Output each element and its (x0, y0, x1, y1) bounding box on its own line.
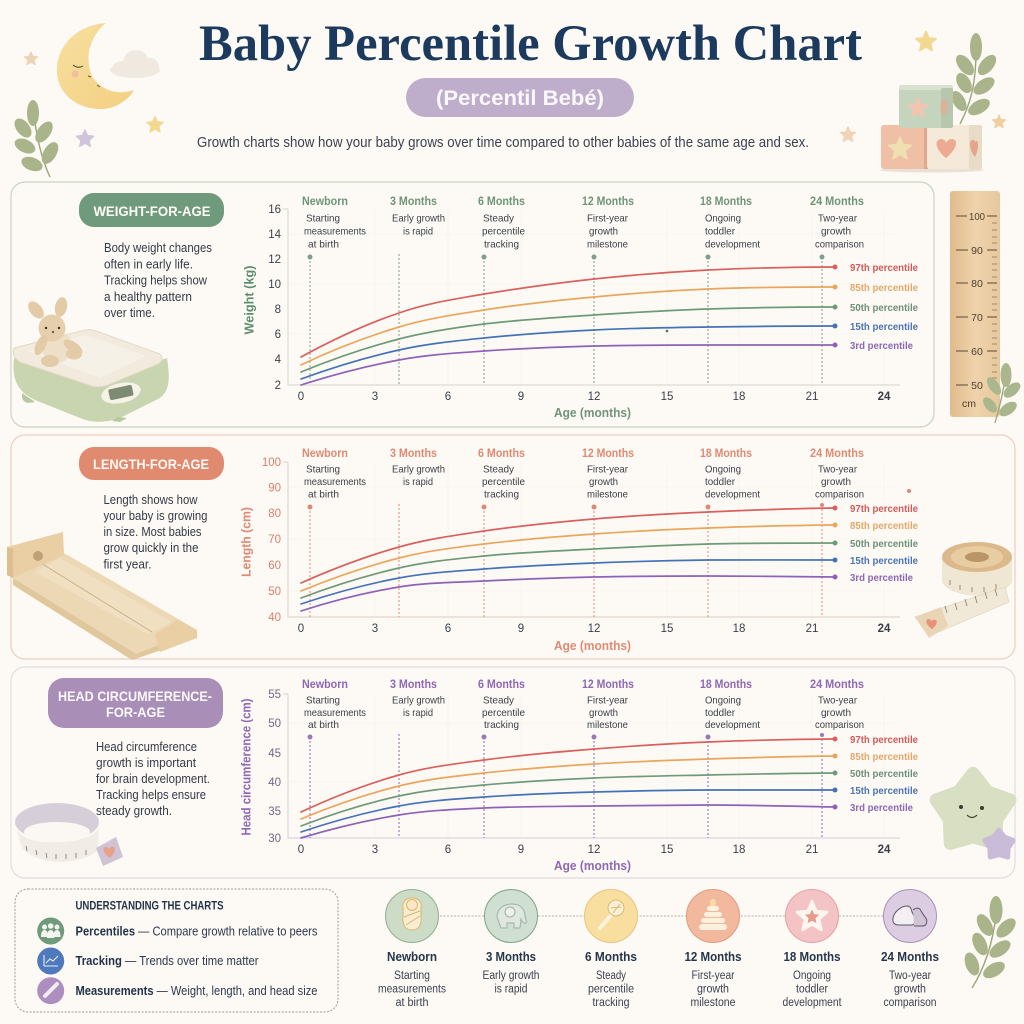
icon: peach star top-right (840, 127, 856, 141)
milestone labels: 12 Months (582, 677, 634, 691)
milestone labels: toddler (705, 476, 735, 488)
text block: length description: grow quickly in the (104, 541, 199, 555)
icon: wooden height ruler: 80 (971, 278, 983, 290)
milestone: 12 months (684, 890, 742, 1009)
percentile labels: 3rd percentile (850, 802, 913, 814)
x tick labels: 9 (518, 844, 524, 856)
y tick labels (262, 457, 281, 624)
milestone: 3 months (482, 890, 540, 996)
x tick labels: 15 (661, 391, 673, 403)
chart: length-for-age (262, 446, 918, 653)
x tick labels: 12 (588, 844, 600, 856)
milestone labels: 3 Months (390, 194, 437, 208)
milestone labels: at birth (308, 719, 339, 731)
percentile labels: 3rd percentile (850, 572, 913, 584)
intro text: Growth charts show how your baby grows over time compared to other babies of the same age and sex. (197, 135, 809, 151)
milestone labels: Early growth (392, 694, 445, 706)
milestone labels: 18 Months (700, 677, 752, 691)
milestone labels: 24 Months (810, 677, 864, 691)
milestone labels: tracking (484, 719, 519, 731)
x tick labels: 21 (806, 844, 818, 856)
icon: percentiles (37, 918, 64, 944)
milestone labels: percentile (482, 476, 525, 488)
icon: lavender star top-left (76, 130, 94, 146)
percentile labels: 97th percentile (850, 262, 918, 274)
x tick labels: 24 (878, 844, 891, 856)
y tick labels: 70 (268, 534, 281, 546)
x tick labels: 21 (806, 623, 818, 635)
y tick labels (268, 689, 281, 845)
text block: head description (96, 740, 210, 818)
icon: wooden height ruler: 100 (969, 211, 985, 223)
milestone: newborn: measurements (378, 984, 446, 996)
icon: wooden height ruler (950, 191, 1000, 417)
milestone labels: development (705, 719, 760, 731)
milestone labels: Steady (483, 212, 515, 224)
milestone: 6 months: 6 Months (585, 949, 637, 964)
x tick labels: 15 (661, 623, 673, 635)
milestone labels: tracking (484, 238, 519, 250)
x tick labels: 0 (298, 623, 304, 635)
y tick labels: 30 (268, 833, 281, 845)
milestone labels: measurements (304, 707, 366, 719)
milestone: 6 months: percentile (588, 984, 634, 996)
y tick labels: 80 (268, 508, 281, 520)
icon: plush star (936, 773, 1013, 857)
milestone dashed lines (308, 254, 824, 385)
milestone labels: Steady (483, 694, 515, 706)
heading pill: weight: WEIGHT-FOR-AGE (94, 203, 210, 219)
milestone labels: growth (821, 226, 851, 238)
milestone labels: 24 Months (810, 194, 864, 208)
percentile labels: 15th percentile (850, 555, 918, 567)
icon: leaf branch on ruler (980, 363, 1023, 423)
x tick labels: 18 (733, 844, 745, 856)
milestone: 18 months: Ongoing (793, 970, 831, 982)
milestone labels: Two-year (818, 212, 857, 224)
milestone labels: growth (589, 226, 618, 238)
x tick labels (298, 844, 891, 856)
panel: head-circumference-for-age (11, 667, 1019, 1012)
heading pill: weight (79, 193, 224, 227)
heading pill: head circumference: FOR-AGE (106, 704, 165, 720)
percentile labels (850, 734, 918, 814)
y tick labels: 50 (268, 586, 281, 598)
y tick labels: 14 (268, 229, 282, 241)
milestone labels: 6 Months (478, 446, 525, 460)
milestone labels: Early growth (392, 212, 445, 224)
percentile curves (301, 736, 838, 838)
percentile labels: 15th percentile (850, 321, 918, 333)
x tick labels: 6 (445, 623, 451, 635)
text block: head description: Tracking helps ensure (96, 788, 206, 802)
milestone dashed lines (308, 733, 824, 838)
milestone labels: 12 Months (582, 194, 634, 208)
milestone labels: 18 Months (700, 194, 752, 208)
percentile labels: 3rd percentile (850, 340, 913, 352)
milestone labels: Ongoing (705, 694, 741, 706)
text block: head description: steady growth. (96, 804, 172, 818)
milestone: 12 months: growth (697, 984, 729, 996)
text block: weight description (104, 241, 212, 320)
text block: weight description: often in early life. (104, 258, 193, 272)
milestone: 24 months: Two-year (889, 970, 931, 982)
text block: length description: first year. (104, 558, 152, 572)
milestone labels: tracking (484, 488, 519, 500)
milestone labels: is rapid (403, 226, 433, 238)
x tick labels: 3 (372, 844, 378, 856)
icon: small star top-right (992, 115, 1006, 128)
text block: head description: for brain development. (96, 772, 210, 786)
heading pill: length: LENGTH-FOR-AGE (93, 456, 209, 472)
y tick labels: 12 (268, 254, 281, 266)
y tick labels: 55 (268, 689, 281, 701)
milestone labels: Ongoing (705, 212, 741, 224)
milestone labels: 6 Months (478, 194, 525, 208)
milestone: 6 months (584, 890, 638, 1009)
x tick labels: 0 (298, 391, 304, 403)
y tick labels (268, 204, 282, 392)
icon: head measuring tape (15, 803, 123, 866)
milestone labels: 12 Months (582, 446, 634, 460)
x tick labels: 24 (878, 391, 891, 403)
milestone labels: Newborn (302, 194, 348, 208)
milestone labels: Starting (306, 464, 340, 476)
milestone: 18 months: 18 Months (784, 949, 840, 964)
y tick labels: 50 (268, 718, 281, 730)
milestone: newborn (378, 890, 446, 1009)
percentile curves (301, 264, 838, 385)
icon: cloud (110, 50, 160, 78)
milestone: 24 months: comparison (884, 997, 936, 1009)
icon: peach star top-left (24, 52, 38, 65)
x tick labels: 9 (518, 623, 524, 635)
milestone labels: milestone (587, 238, 628, 250)
milestone: newborn: at birth (396, 997, 428, 1009)
milestone labels (302, 446, 864, 500)
milestone labels: milestone (587, 488, 628, 500)
milestone labels: at birth (308, 488, 339, 500)
milestone: 24 months: growth (894, 984, 926, 996)
milestone labels: at birth (308, 238, 339, 250)
milestone labels: is rapid (403, 476, 433, 488)
legend item: tracking: Tracking — Trends over time matter (76, 954, 258, 968)
milestone labels: Two-year (818, 464, 857, 476)
milestone: 12 months: First-year (692, 970, 735, 982)
percentile labels: 50th percentile (850, 768, 918, 780)
milestone labels: toddler (705, 226, 735, 238)
milestone: 24 months (881, 890, 939, 1009)
y axis title: head circumference: Head circumference (cm) (238, 698, 254, 836)
icon: measurements (37, 977, 64, 1004)
y tick labels: 8 (275, 304, 281, 316)
y tick labels: 100 (262, 457, 281, 469)
text block: head description: Head circumference (96, 740, 197, 754)
milestone labels: 3 Months (390, 677, 437, 691)
milestone labels: growth (821, 707, 851, 719)
milestone: 12 months: 12 Months (684, 949, 742, 964)
icon: wooden height ruler: 50 (971, 380, 983, 392)
milestone labels: development (705, 238, 760, 250)
y axis title: length: Length (cm) (238, 507, 254, 577)
panel: length-for-age (7, 435, 1019, 1012)
chart: weight-for-age (268, 194, 918, 420)
percentile labels: 50th percentile (850, 302, 918, 314)
milestone labels: measurements (304, 226, 366, 238)
milestone: 12 months: milestone (690, 997, 736, 1009)
percentile labels: 50th percentile (850, 538, 918, 550)
milestone labels: toddler (705, 707, 735, 719)
percentile labels: 97th percentile (850, 734, 918, 746)
legend title: UNDERSTANDING THE CHARTS (76, 900, 224, 912)
x tick labels: 18 (733, 391, 745, 403)
x axis title: length: Age (months) (554, 638, 631, 653)
y tick labels: 40 (268, 777, 281, 789)
icon: yellow star top-left (147, 116, 163, 132)
x tick labels: 24 (878, 623, 891, 635)
percentile labels: 85th percentile (850, 282, 918, 294)
legend item: measurements: Measurements — Weight, length, and head size (76, 984, 318, 998)
milestone labels: Early growth (392, 464, 445, 476)
percentile labels: 97th percentile (850, 503, 918, 515)
milestone labels: 24 Months (810, 446, 864, 460)
y tick labels: 45 (268, 748, 281, 760)
y tick labels: 60 (268, 560, 281, 572)
milestone: 18 months (782, 890, 842, 1009)
icon: wooden height ruler: 70 (971, 312, 983, 324)
milestone: 3 months: is rapid (494, 984, 528, 996)
legend item: percentiles: Percentiles — Compare growth relative to peers (76, 924, 318, 938)
milestone labels: 3 Months (390, 446, 437, 460)
milestone labels: comparison (815, 719, 864, 731)
milestone labels: is rapid (403, 707, 433, 719)
milestone labels: milestone (587, 719, 628, 731)
x tick labels: 6 (445, 844, 451, 856)
y tick labels: 10 (268, 279, 281, 291)
y tick labels: 16 (268, 204, 281, 216)
percentile curves (301, 506, 838, 611)
text block: weight description: Tracking helps show (104, 274, 208, 288)
milestone labels: Ongoing (705, 464, 741, 476)
milestone: 18 months: toddler (796, 984, 828, 996)
icon: sleeping moon (57, 23, 134, 109)
milestone labels: Starting (306, 212, 340, 224)
x tick labels (298, 623, 891, 635)
x tick labels (298, 391, 891, 403)
milestone labels: growth (821, 476, 851, 488)
milestone labels: Steady (483, 464, 515, 476)
text block: length description: in size. Most babies (104, 525, 202, 539)
x tick labels: 21 (806, 391, 818, 403)
icon: yellow star top-right (916, 32, 936, 50)
timeline connector (412, 915, 910, 917)
x axis title: weight: Age (months) (554, 405, 631, 420)
y tick labels: 4 (275, 354, 282, 366)
text block: weight description: over time. (104, 306, 155, 320)
milestone labels: First-year (587, 212, 628, 224)
milestone labels: measurements (304, 476, 366, 488)
heading pill: head circumference: HEAD CIRCUMFERENCE- (58, 688, 212, 704)
milestone labels: Two-year (818, 694, 857, 706)
legend: understanding the charts (15, 889, 338, 1012)
milestone: newborn: Starting (394, 970, 430, 982)
milestone labels: percentile (482, 226, 525, 238)
x tick labels: 18 (733, 623, 745, 635)
milestone: 6 months: Steady (596, 970, 626, 982)
milestone: 3 months: 3 Months (486, 949, 536, 964)
milestone labels: comparison (815, 238, 864, 250)
chart: head-circumference-for-age (268, 677, 918, 873)
x tick labels: 15 (661, 844, 673, 856)
percentile labels (850, 503, 918, 584)
heading pill: head circumference (48, 678, 223, 728)
subtitle pill (406, 78, 634, 117)
x tick labels: 0 (298, 844, 304, 856)
milestone: 24 months: 24 Months (881, 949, 939, 964)
x tick labels: 12 (588, 391, 600, 403)
icon: wooden height ruler: 90 (971, 245, 983, 257)
y tick labels: 40 (268, 612, 281, 624)
icon: wooden length board (7, 532, 197, 660)
milestone labels: percentile (482, 707, 525, 719)
milestone labels: growth (589, 476, 618, 488)
milestone: 18 months: development (782, 997, 842, 1009)
icon: wooden height ruler: cm (962, 398, 976, 410)
icon: tape measure roll (915, 542, 1012, 638)
title: Baby Percentile Growth Chart (199, 16, 862, 72)
milestone labels: Newborn (302, 677, 348, 691)
percentile labels: 15th percentile (850, 785, 918, 797)
milestone labels: First-year (587, 694, 628, 706)
x tick labels: 12 (588, 623, 600, 635)
text block: length description: your baby is growing (104, 509, 208, 523)
milestone: 3 months: Early growth (482, 970, 540, 982)
heading pill: length (79, 447, 224, 480)
x axis title: head: Age (months) (554, 858, 631, 873)
subtitle pill: (Percentil Bebé) (436, 87, 604, 110)
y tick labels: 35 (268, 806, 281, 818)
icon: toy blocks (880, 85, 984, 172)
icon: tracking (37, 948, 64, 974)
text block: length description (104, 493, 208, 572)
panel: weight-for-age (11, 182, 934, 427)
percentile labels: 85th percentile (850, 751, 918, 763)
x tick labels: 3 (372, 391, 378, 403)
milestone labels: development (705, 488, 760, 500)
milestone labels: Newborn (302, 446, 348, 460)
x tick labels: 3 (372, 623, 378, 635)
milestone dashed lines (308, 489, 911, 617)
icon: leaf branch bottom-right (962, 896, 1019, 988)
milestone labels (302, 677, 864, 731)
y tick labels: 90 (268, 482, 281, 494)
milestone labels: 18 Months (700, 446, 752, 460)
icon: leaf branch top-right (948, 33, 1000, 124)
text block: weight description: a healthy pattern (104, 290, 192, 304)
percentile labels: 85th percentile (850, 520, 918, 532)
milestone labels: 6 Months (478, 677, 525, 691)
icon: wooden height ruler: 60 (971, 346, 983, 358)
milestone: 6 months: tracking (592, 997, 630, 1009)
icon: leaf branch top-left (11, 100, 62, 177)
milestone labels: growth (589, 707, 618, 719)
milestone labels: Starting (306, 694, 340, 706)
text block: length description: Length shows how (104, 493, 198, 507)
percentile labels (850, 262, 918, 352)
y axis title: weight: Weight (kg) (242, 266, 256, 334)
x tick labels: 6 (445, 391, 451, 403)
text block: weight description: Body weight changes (104, 241, 212, 255)
icon: baby scale with bunny (13, 296, 169, 422)
text block: head description: growth is important (96, 756, 196, 770)
y tick labels: 2 (275, 380, 281, 392)
milestone labels (302, 194, 864, 250)
x tick labels: 9 (518, 391, 524, 403)
milestone labels: First-year (587, 464, 628, 476)
milestone labels: comparison (815, 488, 864, 500)
y tick labels: 6 (275, 329, 281, 341)
milestone: newborn: Newborn (387, 949, 437, 964)
